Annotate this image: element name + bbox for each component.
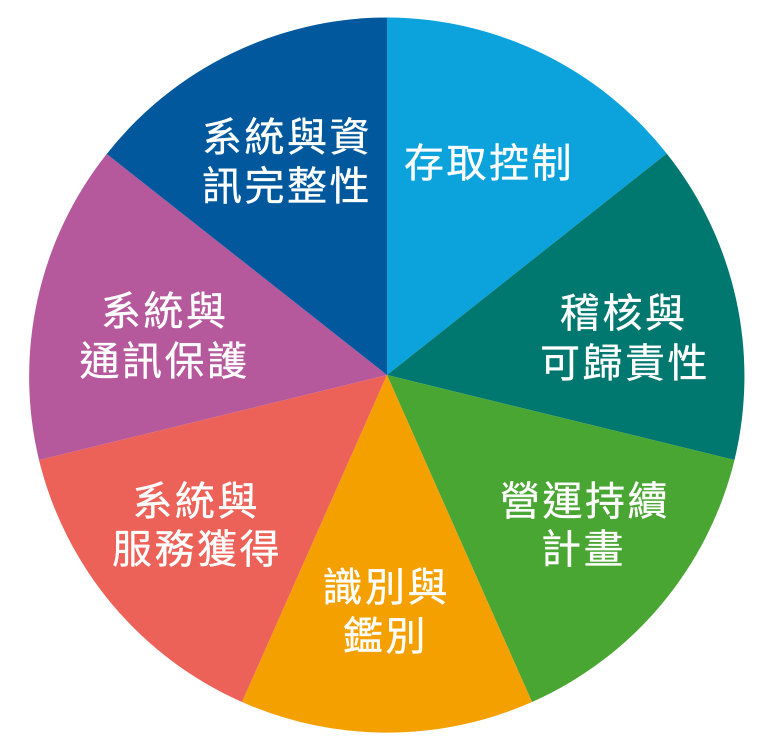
slice: identification and authentication: 識別與 (322, 566, 450, 610)
slice: business continuity planning: 營運持續 (500, 480, 670, 524)
slice: audit and accountability: 可歸責性 (540, 342, 710, 386)
slice: system and communications protection: 系統與 (101, 290, 228, 334)
slice: system and communications protection (29, 154, 387, 460)
slice: access control (387, 18, 667, 375)
slice: system and information integrity (107, 18, 387, 375)
slice: audit and accountability: 稽核與 (560, 292, 688, 336)
slice: audit and accountability (387, 154, 744, 460)
slice: access control: 存取控制 (404, 142, 574, 186)
slice: system and communications protection: 通訊保護 (80, 340, 250, 384)
slice: system and services acquisition (39, 375, 387, 702)
slice: system and services acquisition: 系統與 (132, 480, 260, 524)
slice: identification and authentication: 鑑別 (343, 615, 428, 659)
slice: system and information integrity: 系統與資 (202, 116, 372, 160)
slice: business continuity planning (387, 375, 734, 702)
slice: system and information integrity: 訊完整性 (202, 165, 372, 209)
slice: identification and authentication (242, 375, 532, 733)
slice: business continuity planning: 計畫 (541, 528, 626, 572)
slice: system and services acquisition: 服務獲得 (112, 528, 282, 572)
